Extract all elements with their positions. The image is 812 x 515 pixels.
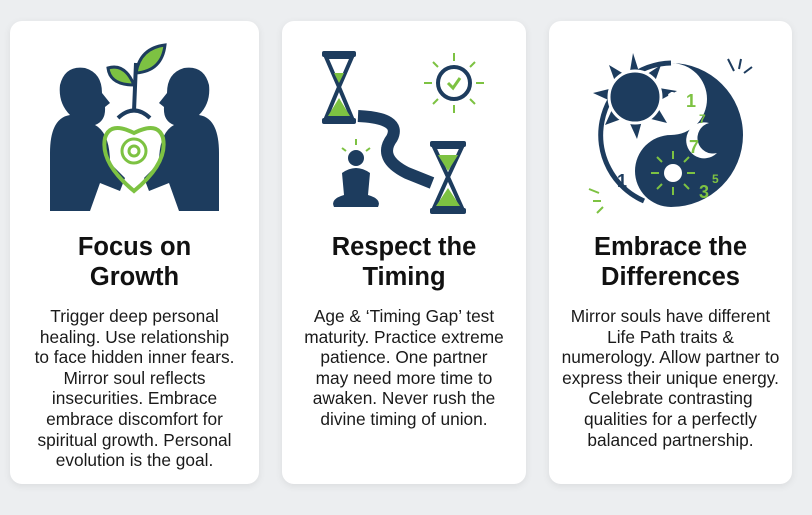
text block: evolution is the goal.: [56, 450, 213, 470]
text block: divine timing of union.: [320, 409, 488, 429]
icon: yin yang sun moon numbers: 1: [667, 89, 677, 109]
text block: Celebrate contrasting: [588, 388, 753, 408]
text block: qualities for a perfectly: [584, 409, 757, 429]
text block: express their unique energy.: [562, 368, 779, 388]
heading: Timing: [362, 263, 446, 291]
icon: yin yang sun moon numbers: 5: [712, 172, 719, 186]
text block: Mirror soul reflects: [63, 368, 206, 388]
text block: Trigger deep personal: [50, 306, 219, 326]
text block: to face hidden inner fears.: [35, 347, 234, 367]
text block: spiritual growth. Personal: [37, 430, 232, 450]
panel: respect the timing: [282, 21, 526, 484]
text block: awaken. Never rush the: [313, 388, 495, 408]
text block: maturity. Practice extreme: [304, 327, 504, 347]
heading: Growth: [90, 263, 179, 291]
heading: Respect the: [332, 233, 476, 261]
heading: Focus on: [78, 233, 191, 261]
icon: yin yang sun moon numbers: 1: [686, 91, 696, 111]
text block: Mirror souls have different: [571, 306, 770, 326]
text block: [34, 306, 234, 470]
icon: yin yang sun moon numbers: [588, 53, 752, 214]
icon: yin yang sun moon numbers: 7: [699, 112, 706, 126]
text block: Life Path traits &: [607, 327, 734, 347]
text block: [304, 306, 504, 429]
icon: yin yang sun moon numbers: 7: [689, 137, 699, 157]
icon: hourglasses, path, clock, meditating person: [322, 51, 484, 214]
heading: Embrace the: [594, 233, 747, 261]
heading: [332, 233, 476, 291]
text block: balanced partnership.: [587, 430, 754, 450]
text block: patience. One partner: [320, 347, 488, 367]
text block: may need more time to: [316, 368, 492, 388]
text block: numerology. Allow partner to: [562, 347, 779, 367]
heading: Differences: [601, 263, 740, 291]
icon: yin yang sun moon numbers: 1: [617, 171, 627, 191]
icon: two people with heart and sprout: [50, 43, 219, 211]
text block: embrace discomfort for: [46, 409, 223, 429]
heading: [594, 233, 747, 291]
text block: Age & ‘Timing Gap’ test: [314, 306, 494, 326]
text block: healing. Use relationship: [40, 327, 229, 347]
panel: embrace the differences: [549, 21, 792, 484]
text block: insecurities. Embrace: [52, 388, 217, 408]
panel: focus on growth: [10, 21, 259, 484]
icon: yin yang sun moon numbers: 3: [699, 182, 709, 202]
heading: [78, 233, 191, 291]
text block: [562, 306, 779, 450]
